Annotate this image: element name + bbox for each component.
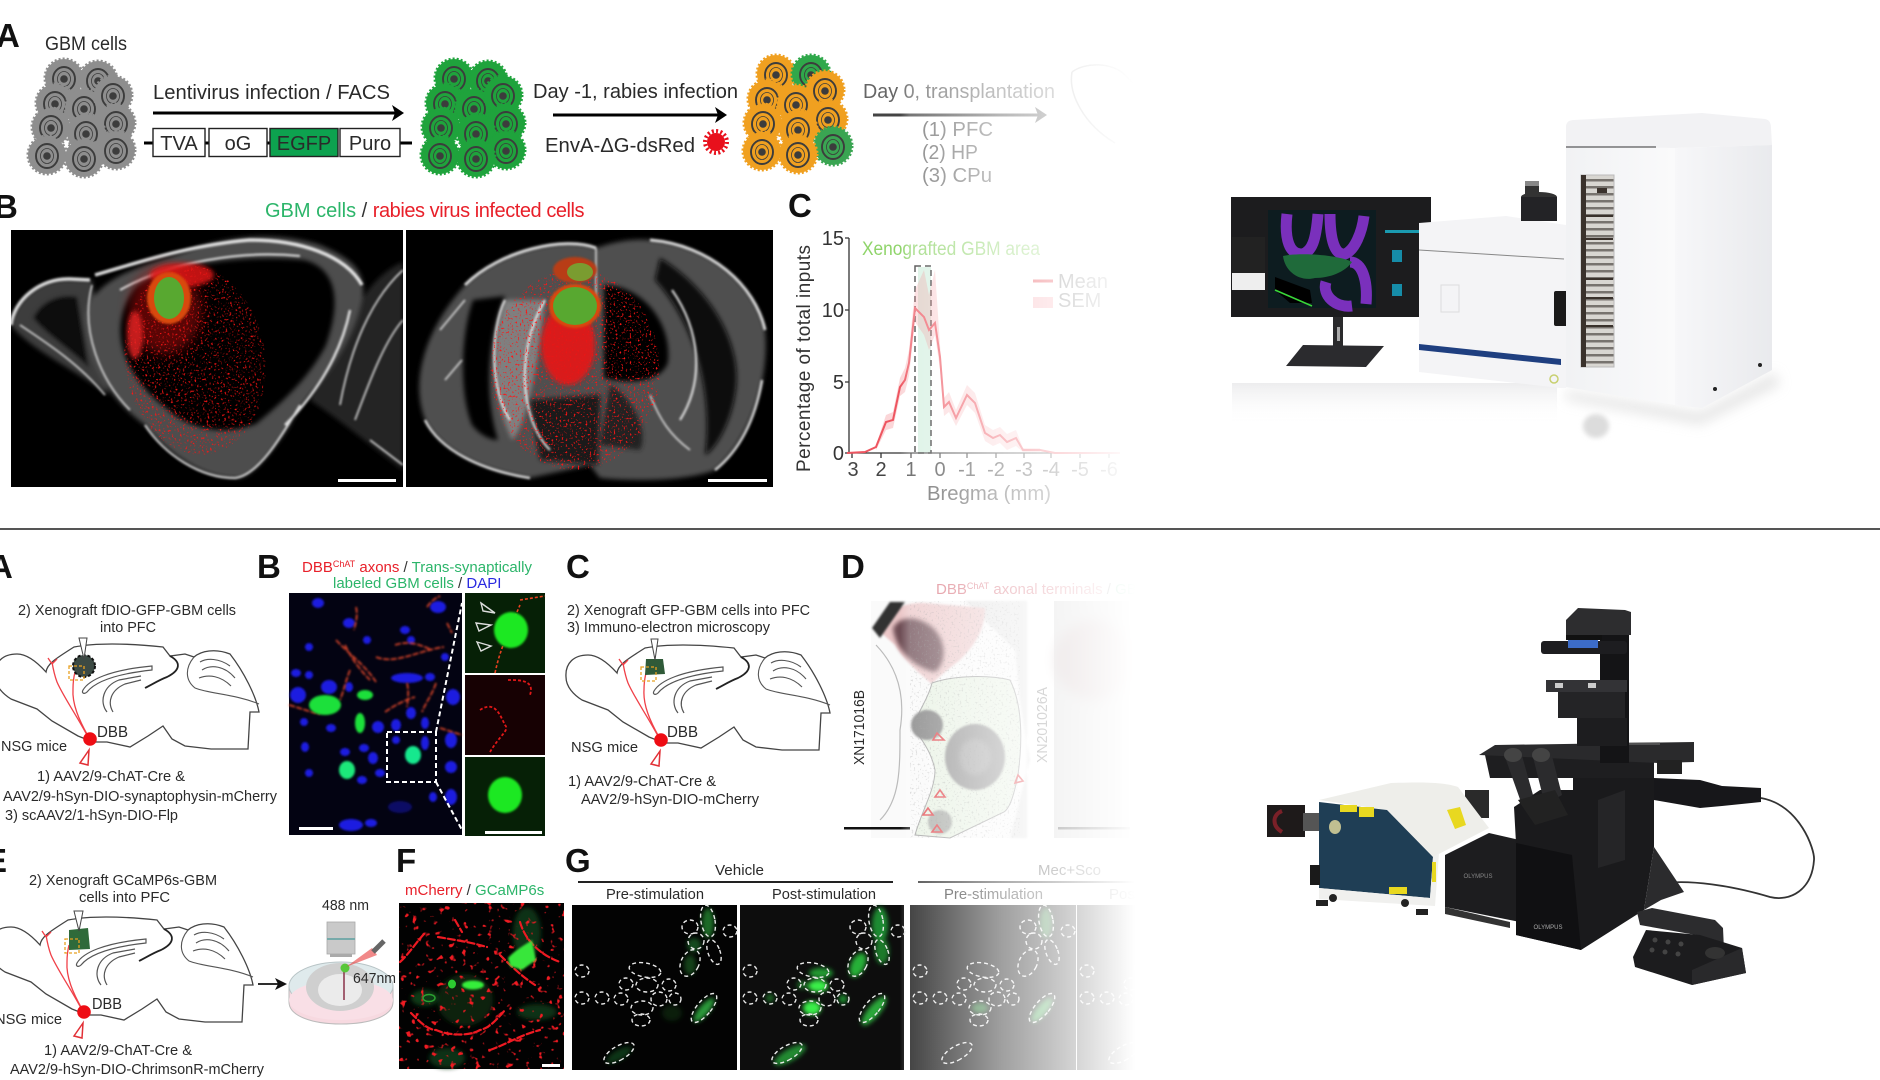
text: injections [10, 1042, 264, 1078]
x tick labels: -6 [1100, 459, 1118, 481]
title: axonal terminals: / GBM [1107, 581, 1149, 598]
diagram: sagittal brain [566, 639, 830, 766]
x tick labels: -2 [987, 459, 1005, 481]
text: XN201026A: XN201026A [1034, 687, 1051, 763]
text: 647nm: 647nm [353, 970, 396, 987]
label D: D [841, 548, 865, 585]
header: Mec+Sco group: Post [1109, 886, 1140, 903]
panel: lower F confocal [396, 842, 564, 1069]
text: injection list: 3) scAAV2/1-hSyn-DIO-Flp [5, 807, 178, 824]
x tick labels: 1 [905, 459, 917, 481]
text: injections: AAV2/9-hSyn-DIO-ChrimsonR-mCherry [10, 1061, 264, 1078]
panel: lower D electron microscopy [841, 548, 1149, 838]
image: coronal brain [406, 230, 773, 487]
arrow: lentivirus [153, 105, 404, 121]
panel: top B brain renders [0, 188, 773, 487]
panel: top A workflow [0, 17, 1140, 187]
panel: lower E schematic [0, 842, 396, 1078]
text: NSG mice: NSG mice [571, 739, 638, 756]
label F: F [396, 842, 416, 879]
text: xenograft and immuno-EM: 2) Xenograft GFP-GBM cells into PFC [567, 602, 810, 619]
construct: TVA oG EGFP Puro [144, 128, 412, 156]
handle [1554, 291, 1568, 326]
mean curve [847, 308, 1120, 453]
annotation: xenografted area: Xenografted GBM area [862, 239, 1040, 260]
text: injections [568, 773, 759, 808]
scale bar [338, 479, 396, 482]
y tick labels: 0 [833, 443, 844, 465]
legend: SEM [1058, 290, 1101, 312]
image: vehicle pre-stimulation [572, 904, 737, 1070]
column and head [1541, 608, 1631, 763]
text: GCaMP xenograft: 2) Xenograft GCaMP6s-GBM [29, 872, 217, 889]
text: DBB: DBB [92, 996, 122, 1013]
floor reflection [1232, 383, 1557, 425]
text: GBM cells: GBM cells [45, 34, 127, 55]
microscope body [1514, 763, 1684, 950]
y tick labels [822, 228, 844, 465]
scale bar [485, 831, 542, 834]
tower shadow [1566, 372, 1780, 425]
label G: G [565, 842, 591, 879]
inset: red channel [465, 675, 545, 755]
x axis title: Bregma (mm) [927, 483, 1051, 505]
icon: green cell cluster [421, 59, 525, 177]
inset: merged [465, 593, 545, 673]
image: lateral brain [11, 230, 403, 487]
y axis title: Percentage of total inputs [794, 245, 815, 472]
monitor stand [1286, 317, 1384, 367]
text: sites list: (1) PFC [922, 119, 993, 141]
image: axons and GBM cells [399, 903, 564, 1069]
header: vehicle group: Pre-stimulation [606, 886, 704, 903]
x tick labels: 3 [847, 459, 859, 481]
title: DBB axons / DAPI: ChAT [333, 559, 356, 569]
text: lentivirus step: Lentivirus infection / FACS [153, 82, 390, 104]
title: GBM / rabies: GBM cells / rabies virus infected cells [265, 200, 585, 222]
text: GCaMP xenograft [29, 872, 217, 906]
header: Mec+Sco group: Pre-stimulation [944, 886, 1043, 903]
title: DBB axons / DAPI: / Trans-synaptically [404, 559, 532, 576]
text: EnvA virus: EnvA-ΔG-dsRed [545, 135, 695, 157]
image: EM left [844, 601, 1030, 838]
SEM band [876, 270, 1040, 452]
icon: red virus [705, 131, 727, 153]
text: XN171016B: XN171016B [851, 690, 868, 765]
text: injection list [3, 768, 277, 824]
construct: TVA oG EGFP Puro: oG [225, 133, 251, 155]
icon: slice imaging dish [289, 922, 393, 1024]
text: 488 nm: 488 nm [322, 897, 369, 914]
scale bar [1058, 827, 1130, 830]
x tick labels: -4 [1042, 459, 1060, 481]
scale bar [542, 1064, 560, 1067]
icon: grey GBM cell cluster [28, 59, 135, 177]
y tick labels: 15 [822, 228, 844, 250]
panel: inverted microscope instrument [1267, 608, 1814, 985]
panel: top C chart [788, 187, 1120, 505]
text: injections: 1) AAV2/9-ChAT-Cre & [568, 773, 716, 790]
text: xenograft and immuno-EM [567, 602, 810, 636]
image: EM right [1054, 601, 1144, 838]
panel: lower C schematic [566, 548, 830, 808]
black control box: OLYMPUS [1464, 874, 1492, 880]
label B lower: B [257, 548, 281, 585]
icon: faint brain outline [1071, 65, 1140, 143]
arrow: to dish [258, 978, 287, 990]
label C top: C [788, 187, 812, 224]
power button [1550, 375, 1558, 383]
fade overlay from imagery to white [900, 0, 1135, 1080]
title: axonal terminals: DBB [936, 581, 967, 598]
arrow: transplantation [873, 107, 1047, 123]
y tick labels: 5 [833, 372, 844, 394]
header: Mec+Sco group [918, 862, 1140, 903]
binocular eyepieces [1504, 748, 1568, 825]
scanner camera [1521, 181, 1557, 221]
remote controller [1633, 908, 1746, 985]
right illuminator arm [1654, 778, 1761, 808]
text: day 0 transplantation: Day 0, transplantation [863, 81, 1055, 103]
header: Mec+Sco group: Mec+Sco [1038, 862, 1101, 879]
text: xenograft step: 2) Xenograft fDIO-GFP-GBM cells [18, 602, 236, 619]
text: sites list: (3) CPu [922, 165, 992, 187]
microscope body: OLYMPUS [1534, 925, 1562, 931]
header: vehicle group [578, 862, 893, 903]
text: GCaMP xenograft: cells into PFC [79, 889, 170, 906]
legend [1033, 271, 1108, 312]
scale bar [708, 479, 767, 482]
stage [1479, 742, 1694, 778]
y tick labels: 10 [822, 300, 844, 322]
construct: TVA oG EGFP Puro: Puro [349, 133, 391, 155]
legend: Mean [1058, 271, 1108, 293]
text: injections: AAV2/9-hSyn-DIO-mCherry [581, 791, 759, 808]
title: axonal terminals: axonal terminals [989, 581, 1103, 598]
construct: TVA oG EGFP Puro: EGFP [277, 133, 331, 155]
title: DBB axons / DAPI [302, 559, 532, 592]
GBM area band [915, 266, 931, 453]
x tick labels: -1 [958, 459, 976, 481]
image: main confocal [289, 593, 462, 835]
title: DBB axons / DAPI: axons [355, 559, 399, 576]
laser unit [1267, 782, 1489, 915]
image: Mec+Sco post-stimulation [1077, 905, 1124, 1070]
x tick labels: -5 [1071, 459, 1089, 481]
x tick labels: -3 [1015, 459, 1033, 481]
text: sites list [922, 119, 993, 187]
text: sites list: (2) HP [922, 142, 978, 164]
slide rack window [1581, 175, 1614, 367]
header: vehicle group: Vehicle [715, 862, 764, 879]
monitor [1231, 197, 1431, 317]
x tick labels [847, 459, 1118, 481]
text: DBB: DBB [667, 724, 698, 741]
title: mCherry / GCaMP6s: mCherry / GCaMP6s [405, 882, 544, 899]
text: DBB: DBB [97, 724, 128, 741]
inset: green channel [465, 757, 545, 836]
panel: lower B confocal [257, 548, 545, 836]
image: vehicle post-stimulation [740, 904, 905, 1070]
panel: lower G calcium imaging [565, 842, 1242, 1070]
text: into PFC: into PFC [100, 619, 156, 636]
icon: orange cell cluster [743, 55, 852, 173]
panel: slide scanner instrument [1231, 113, 1780, 438]
text: injection list: 1) AAV2/9-ChAT-Cre & [37, 768, 185, 785]
x tick labels: 0 [934, 459, 946, 481]
text: injection list: AAV2/9-hSyn-DIO-synaptophysin-mCherry [3, 788, 277, 805]
text: injections: 1) AAV2/9-ChAT-Cre & [44, 1042, 192, 1059]
reflection below tower [1583, 414, 1609, 438]
blue band [1419, 344, 1561, 365]
scale bar [299, 827, 333, 830]
image: Mec+Sco pre-stimulation [910, 904, 1076, 1070]
diagram: sagittal brain [0, 638, 259, 765]
slide tower [1566, 113, 1772, 408]
title: DBB axons / DAPI: labeled GBM cells / DAPI [333, 575, 501, 592]
text: NSG mice: NSG mice [1, 738, 67, 755]
axes [845, 238, 1120, 458]
panel: lower A schematic [0, 548, 277, 824]
text: day -1: Day -1, rabies infection [533, 81, 738, 103]
text: xenograft and immuno-EM: 3) Immuno-electron microscopy [567, 619, 770, 636]
scanner body [1419, 216, 1568, 388]
black control box [1445, 833, 1528, 928]
x tick labels: 2 [875, 459, 887, 481]
title: axonal terminals: ChAT [967, 581, 990, 591]
header: vehicle group: Post-stimulation [772, 886, 876, 903]
construct: TVA oG EGFP Puro: TVA [160, 133, 198, 155]
scale bar [844, 827, 910, 830]
tower ports [1758, 363, 1762, 367]
fibre cable [1665, 798, 1814, 898]
arrow: rabies infection [553, 107, 727, 123]
diagram: sagittal brain [0, 911, 253, 1038]
title: DBB axons / DAPI: DBB [302, 559, 333, 576]
inset marker: dashed square and zoom lines [387, 603, 462, 830]
label C lower: C [566, 548, 590, 585]
